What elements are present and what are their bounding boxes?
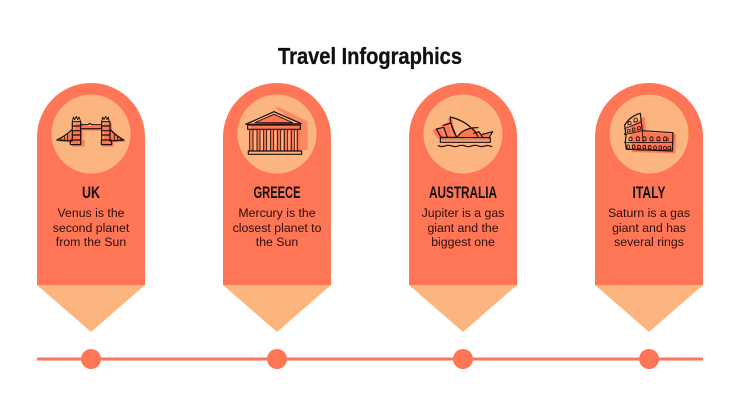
text: Italy: several rings: [614, 235, 684, 249]
heading: Italy: ITALY: [632, 184, 666, 202]
icon: Colosseum: [624, 113, 676, 153]
icon: Sydney Opera House: [432, 117, 493, 147]
text: UK: second planet: [53, 221, 130, 235]
text: Greece: Mercury is the: [238, 206, 316, 220]
text: UK: from the Sun: [56, 235, 126, 249]
icon: Tower Bridge: [57, 116, 126, 147]
text: Australia: Jupiter is a gas: [422, 206, 504, 220]
text: Greece: closest planet to: [233, 221, 322, 235]
panel: Greece: [223, 83, 331, 332]
title: Travel Infographics: [278, 43, 462, 69]
icon: Parthenon temple: [246, 107, 308, 154]
text: UK: Venus is the: [58, 206, 125, 220]
text: Australia: giant and the: [427, 221, 499, 235]
text: Italy: giant and has: [612, 221, 686, 235]
timeline: [37, 349, 703, 369]
heading: Australia: AUSTRALIA: [429, 184, 497, 202]
panel: Australia: [409, 83, 517, 332]
heading: UK: UK: [82, 184, 100, 202]
panel: Italy: [595, 83, 703, 332]
heading: Greece: GREECE: [254, 184, 300, 202]
text: Australia: biggest one: [431, 235, 495, 249]
text: Italy: Saturn is a gas: [608, 206, 690, 220]
text: Greece: the Sun: [256, 235, 298, 249]
panel: UK: [37, 83, 145, 332]
